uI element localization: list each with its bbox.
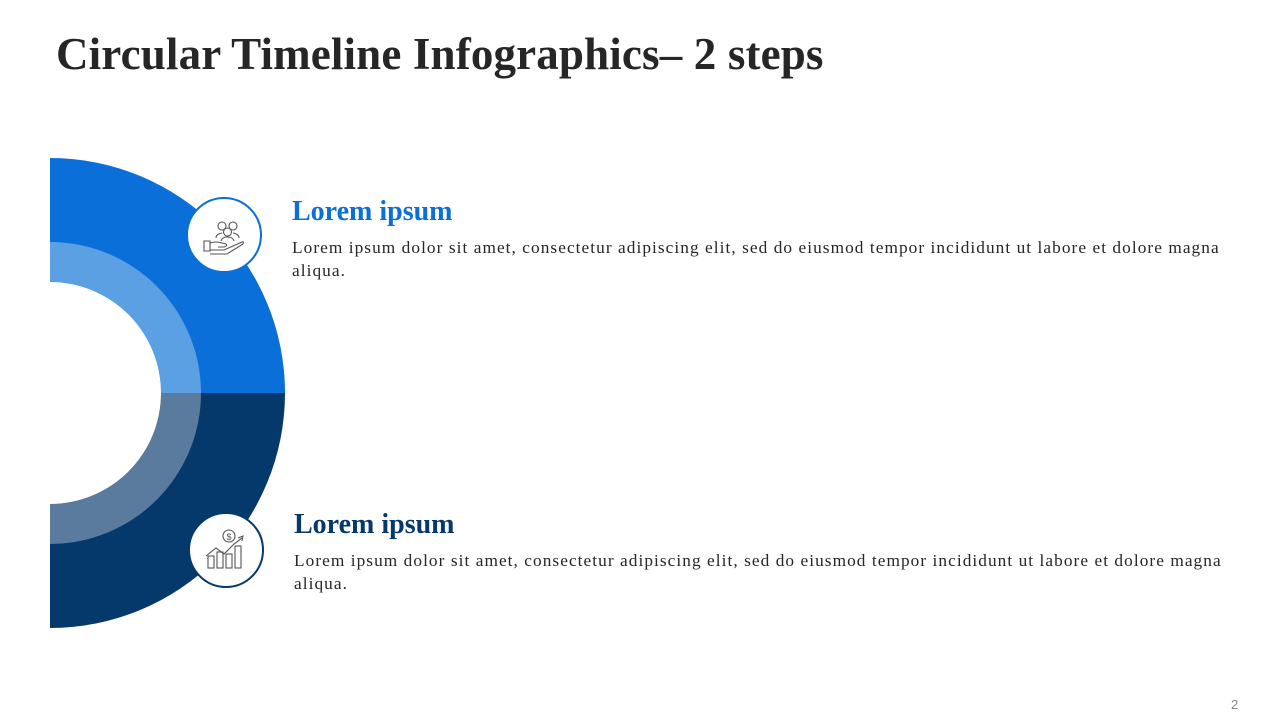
segment: bottom inner ring	[50, 393, 201, 544]
step 2 heading: Lorem ipsum	[294, 509, 454, 540]
icon: growth chart with dollar	[189, 513, 263, 587]
step 1 text	[292, 238, 1220, 280]
icon: hand with people	[187, 198, 261, 272]
step 2 text	[294, 551, 1222, 593]
segment: top outer	[50, 158, 285, 393]
step 1 text: aliqua.	[292, 261, 346, 280]
center hole	[50, 282, 161, 504]
step 2 text: aliqua.	[294, 574, 348, 593]
icon: growth chart with dollar: $	[226, 532, 232, 542]
segment: bottom outer	[50, 393, 285, 628]
segment: top inner ring	[50, 242, 201, 393]
step 2 text: Lorem ipsum dolor sit amet, consectetur adipiscing elit, sed do eiusmod tempor incididunt ut labore et dolore magna	[294, 551, 1222, 570]
step 1 text: Lorem ipsum dolor sit amet, consectetur adipiscing elit, sed do eiusmod tempor incididunt ut labore et dolore magna	[292, 238, 1220, 257]
page number: 2	[1231, 697, 1238, 712]
title: Circular Timeline Infographics– 2 steps	[56, 29, 824, 79]
step 1 heading: Lorem ipsum	[292, 196, 452, 227]
